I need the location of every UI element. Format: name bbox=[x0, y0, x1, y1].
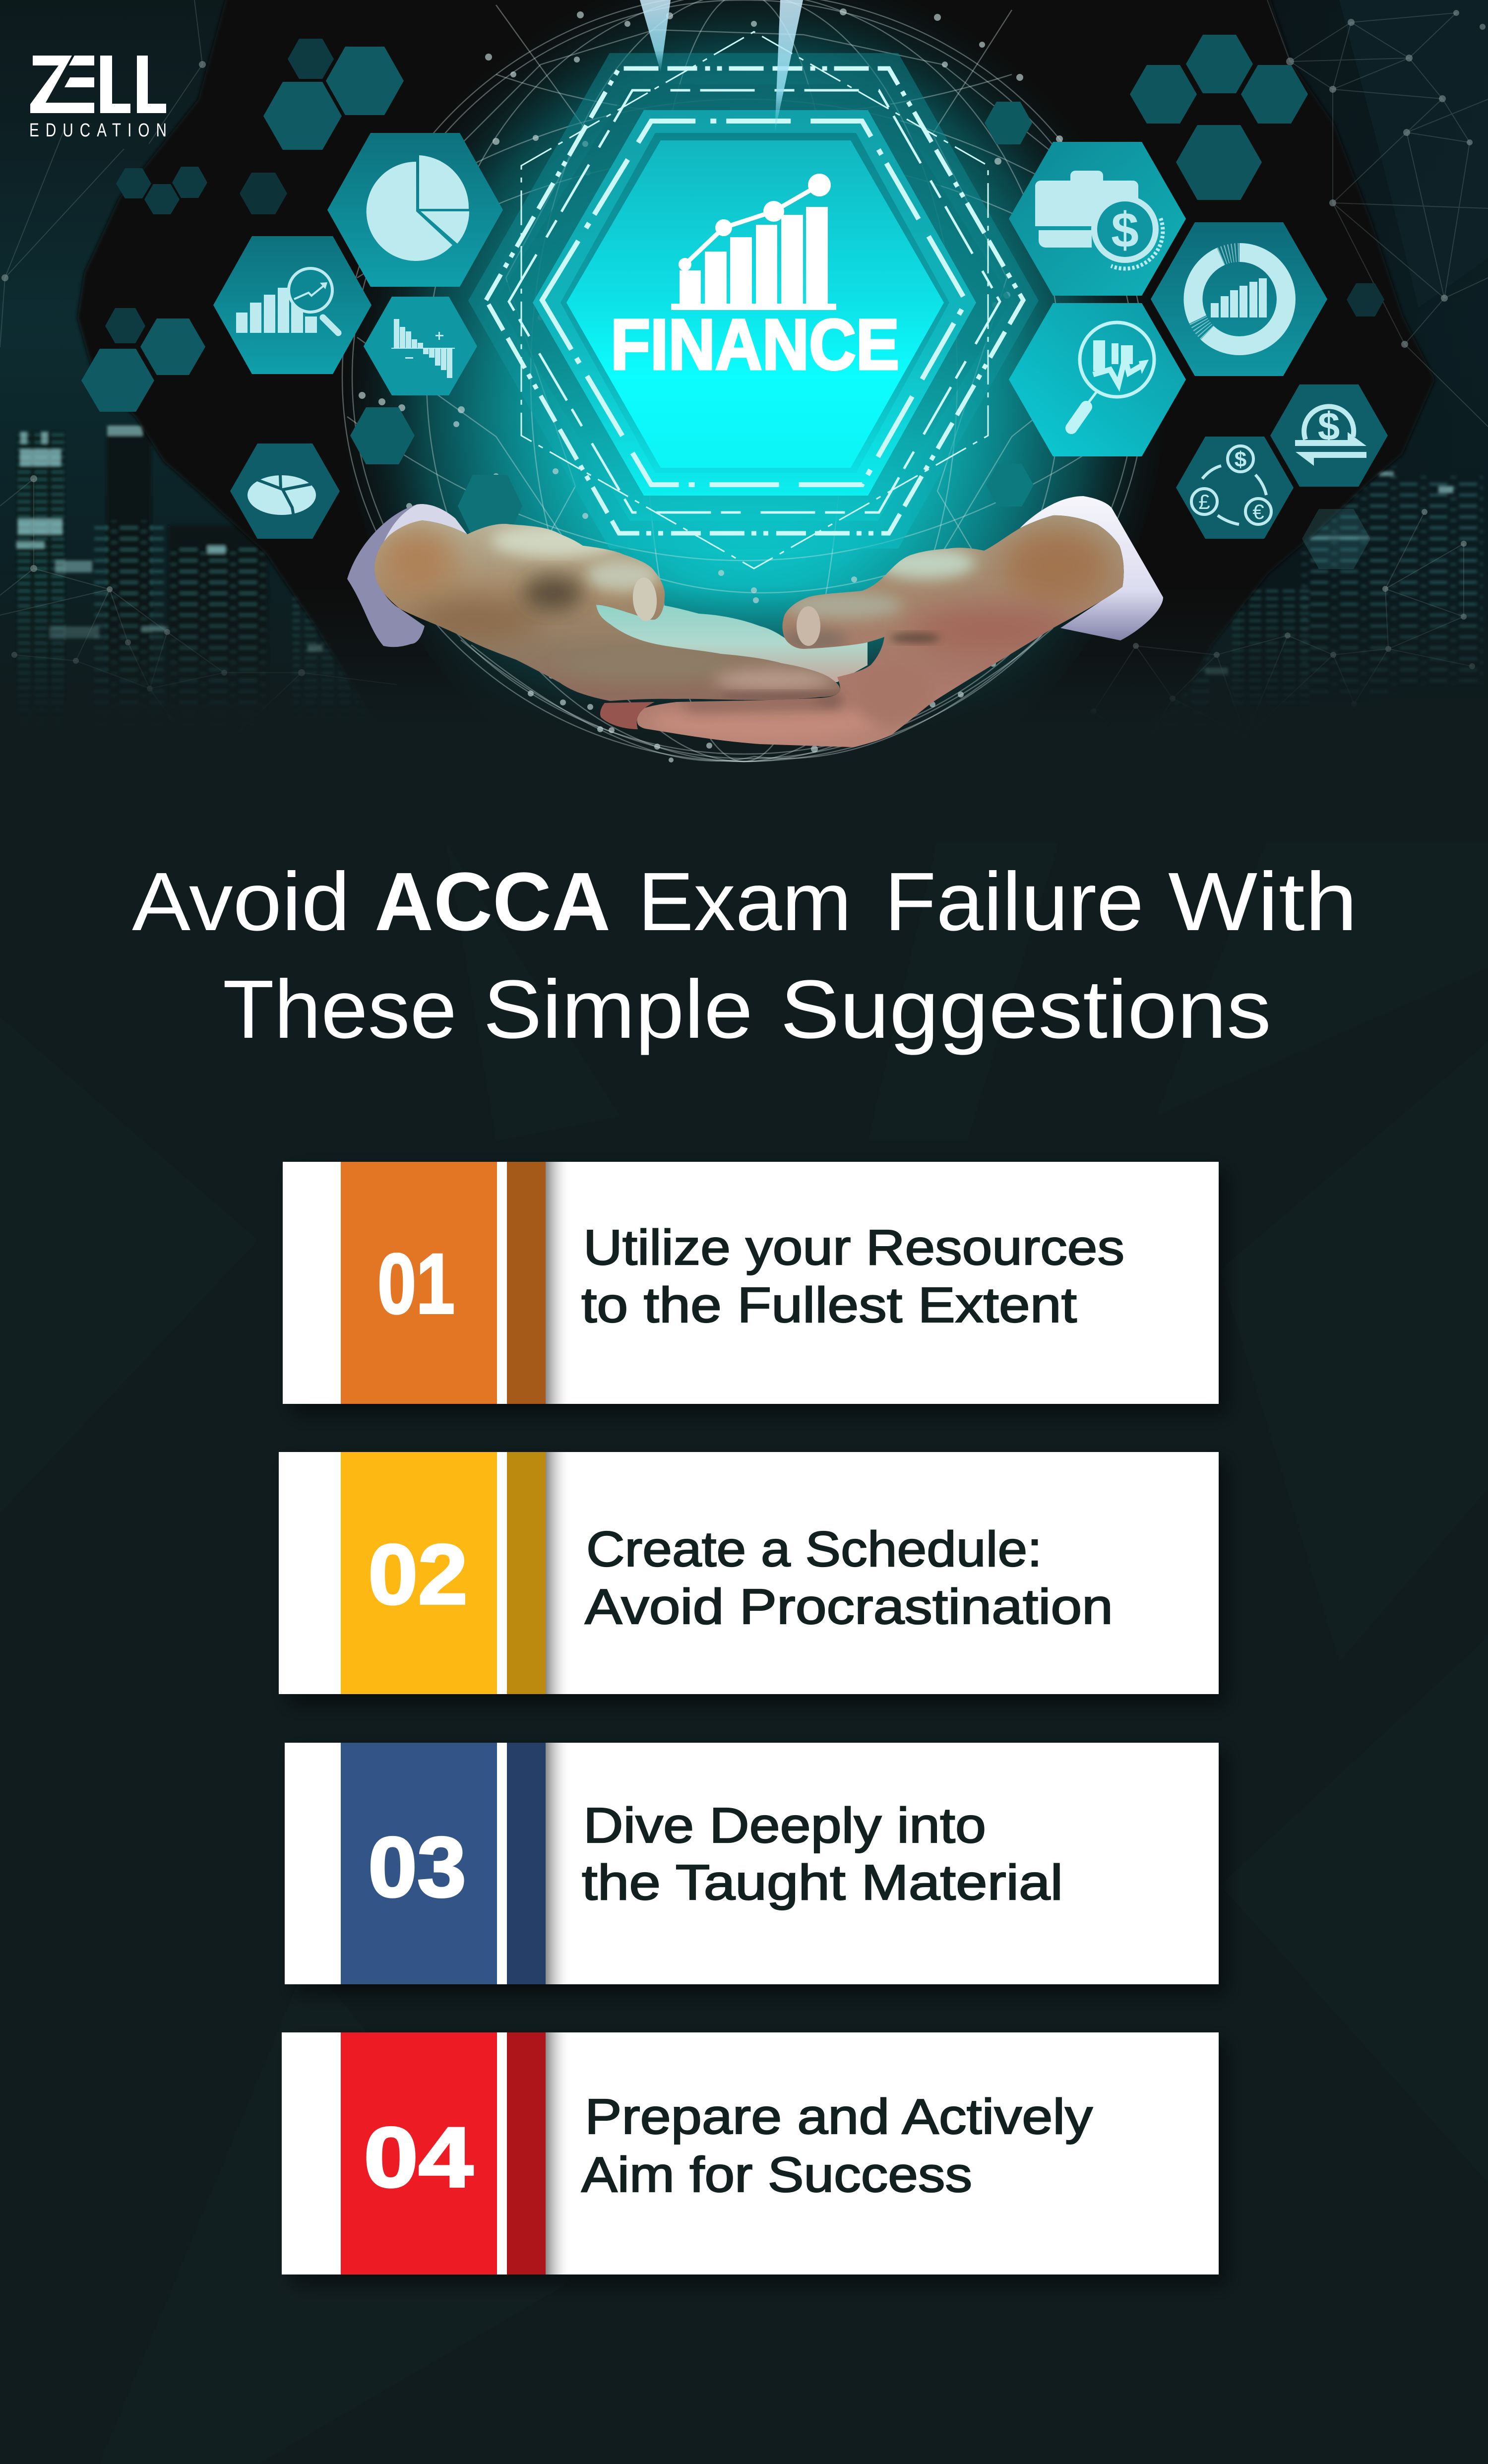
wireframe globe bbox=[342, 0, 1146, 762]
text: suggestion 04 bbox=[581, 2089, 1093, 2203]
right city skyline bbox=[1091, 466, 1483, 744]
left hexagon cluster bbox=[81, 39, 522, 539]
panel: suggestion 04 bbox=[282, 2032, 1225, 2284]
thumbnails bbox=[631, 576, 658, 622]
icon hexagon: currency cycle: £ bbox=[1198, 490, 1210, 513]
palm between the thumbs bbox=[590, 604, 868, 682]
main title: Suggestions bbox=[780, 963, 1271, 1056]
text: suggestion 04: Aim for Success bbox=[581, 2147, 972, 2203]
heading: FINANCE: FINANCE bbox=[611, 305, 899, 384]
hero backdrop bbox=[0, 0, 1488, 764]
icon hexagon: currency cycle bbox=[1176, 437, 1294, 539]
text: suggestion 01: Utilize your Resources bbox=[583, 1220, 1124, 1275]
suit silhouette bbox=[77, 0, 1435, 764]
main title: ACCA bbox=[374, 856, 611, 948]
shirt cuff right bbox=[1020, 496, 1163, 640]
main title: Failure bbox=[884, 856, 1144, 948]
text: suggestion 04: Prepare and Actively bbox=[585, 2089, 1093, 2145]
icon hexagon: briefcase and coin bbox=[1009, 142, 1186, 296]
main hexagon bbox=[566, 140, 944, 468]
number 01: 01 bbox=[377, 1236, 455, 1331]
icon hexagon: magnifier on trend bbox=[1009, 303, 1186, 456]
panel: suggestion 03 bbox=[285, 1743, 1225, 1994]
main title: These bbox=[223, 963, 457, 1056]
background: faint diagonal geometry bbox=[0, 660, 1488, 2464]
logo: Zell Education bbox=[29, 56, 167, 141]
number 04: 04 bbox=[364, 2110, 473, 2205]
icon hexagon: dollar coin with arrows bbox=[1270, 384, 1388, 487]
text: suggestion 01: to the Fullest Extent bbox=[581, 1277, 1077, 1333]
lower fingertip bbox=[600, 702, 655, 729]
finance emblem: nested hexagons bbox=[468, 32, 1039, 569]
shading: left hand bbox=[377, 526, 456, 595]
icon: finance bar chart bbox=[671, 174, 836, 310]
shirt cuff rim left bbox=[379, 504, 467, 553]
icon hexagon: bar chart with magnifier bbox=[213, 236, 372, 374]
icon hexagon: pie chart 3D bbox=[230, 443, 340, 539]
icon hexagon: currency cycle: $ bbox=[1235, 447, 1246, 472]
right hexagon cluster bbox=[985, 35, 1388, 569]
number 02: 02 bbox=[368, 1527, 468, 1622]
panel: suggestion 02 bbox=[279, 1452, 1225, 1704]
bottom fade of the hero bbox=[0, 585, 1488, 744]
right hand bbox=[630, 511, 1131, 754]
text: suggestion 03: the Taught Material bbox=[582, 1855, 1063, 1910]
icon hexagon: dollar coin with arrows: $ bbox=[1318, 404, 1340, 448]
left network mesh bbox=[0, 0, 397, 730]
hands cupping the emblem bbox=[347, 496, 1163, 754]
text: suggestion 02 bbox=[585, 1521, 1113, 1635]
main title: Simple bbox=[483, 963, 753, 1056]
number 03: 03 bbox=[368, 1820, 466, 1915]
icon hexagon: pie chart bbox=[327, 133, 503, 287]
main title: Avoid bbox=[132, 856, 350, 948]
main title: With bbox=[1168, 856, 1358, 948]
text: suggestion 03 bbox=[582, 1798, 1063, 1910]
light beams bbox=[640, 0, 803, 133]
icon hexagon: waterfall chart bbox=[364, 297, 477, 395]
icon hexagon: briefcase and coin: $ bbox=[1111, 202, 1139, 258]
text: suggestion 01 bbox=[581, 1220, 1124, 1333]
logo: Zell Education: EDUCATION bbox=[29, 120, 167, 141]
panel: suggestion 01 bbox=[283, 1162, 1225, 1414]
shirt cuff left bbox=[347, 504, 467, 647]
left city skyline bbox=[16, 426, 367, 744]
text: suggestion 02: Avoid Procrastination bbox=[585, 1579, 1113, 1635]
solid base below the hero bbox=[0, 744, 1488, 843]
dash-dot hexagon outlines bbox=[486, 32, 1023, 569]
right network mesh bbox=[1094, 0, 1488, 752]
main title bbox=[132, 856, 1358, 1056]
network nodes bbox=[1, 10, 1486, 754]
text: suggestion 03: Dive Deeply into bbox=[583, 1798, 986, 1853]
left hand bbox=[367, 516, 848, 704]
main title: Exam bbox=[638, 856, 852, 948]
icon hexagon: donut chart bbox=[1151, 222, 1327, 376]
icon hexagon: currency cycle: € bbox=[1252, 500, 1264, 523]
shading: right hand bbox=[1002, 526, 1111, 605]
central glow bbox=[342, 0, 1166, 823]
text: suggestion 02: Create a Schedule: bbox=[586, 1521, 1042, 1577]
